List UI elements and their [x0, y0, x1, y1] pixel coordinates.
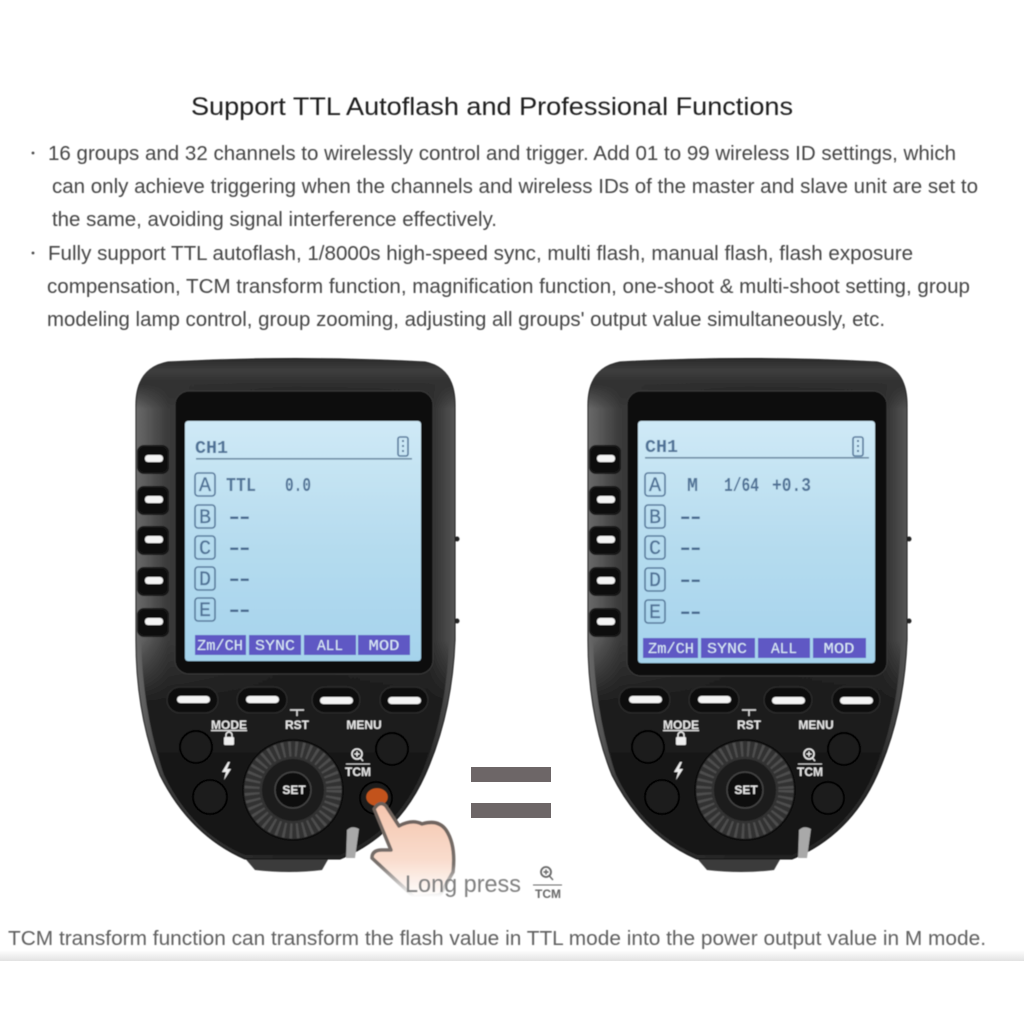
key labels: RST [737, 718, 762, 732]
dial: SET [734, 783, 758, 797]
key labels: TCM [797, 765, 823, 779]
device body [588, 358, 907, 859]
side nubs [906, 536, 912, 542]
TCM button [812, 782, 844, 814]
long press label [405, 867, 562, 901]
LCD screen: -- [229, 599, 250, 621]
LCD screen: +0.3 [772, 475, 811, 497]
icon: pressing hand [366, 788, 454, 897]
LCD screen: B [199, 507, 211, 530]
LCD screen: E [199, 600, 211, 623]
LCD screen [185, 421, 421, 661]
LCD screen: Zm/CH [648, 642, 694, 658]
icon: TCM zoom [533, 867, 562, 901]
icon: TCM zoom: TCM [535, 887, 561, 901]
left side buttons [138, 446, 168, 636]
LCD screen: ALL [317, 639, 343, 655]
dial [695, 740, 795, 840]
LCD screen [638, 421, 875, 663]
LCD screen: C [199, 538, 211, 561]
text block: feature list: 16 groups and 32 channels to wirelessly control and trigger. Add 01 to 99 wireless ID settings, which [48, 143, 956, 165]
text block: feature list: compensation, TCM transform function, magnification function, one-shoot & multi-shoot setting, group [47, 276, 970, 298]
key labels: MODE [663, 718, 699, 732]
text block: feature list: Fully support TTL autoflash, 1/8000s high-speed sync, multi flash, manual flash, flash exposure [48, 243, 913, 265]
LCD screen: CH1 [195, 439, 228, 459]
LCD screen: A [199, 475, 211, 498]
LCD screen: -- [680, 601, 701, 623]
text block: feature list: modeling lamp control, group zooming, adjusting all groups' output value simultaneously, etc. [47, 309, 885, 331]
side nubs [454, 536, 460, 542]
LCD screen: MOD [824, 642, 854, 658]
menu button [376, 733, 408, 765]
LCD screen: 1/64 [724, 475, 759, 497]
screen bezel [627, 391, 887, 676]
LCD screen: ALL [771, 642, 797, 658]
LCD screen: -- [680, 569, 701, 591]
text block: feature list: the same, avoiding signal interference effectively. [52, 209, 497, 231]
text block: feature list: can only achieve triggering when the channels and wireless IDs of the master and slave unit are set to [52, 176, 978, 198]
key labels: RST [285, 718, 310, 732]
round buttons [632, 731, 664, 763]
LCD screen: SYNC [255, 639, 295, 655]
caption: TCM transform function can transform the flash value in TTL mode into the power output value in M mode. [8, 928, 986, 950]
key labels [663, 710, 834, 780]
LCD screen: CH1 [645, 438, 678, 458]
device body [136, 358, 455, 859]
device: right transmitter in M mode [588, 358, 912, 872]
LCD screen: MOD [368, 639, 400, 655]
title: Support TTL Autoflash and Professional Functions [191, 93, 793, 121]
key labels: MENU [346, 718, 382, 732]
LCD screen: -- [229, 506, 250, 528]
LCD screen: -- [680, 537, 701, 559]
soft keys [167, 687, 428, 713]
LCD screen: C [649, 538, 661, 561]
LCD screen: 0.0 [285, 475, 311, 497]
key labels: MODE [211, 718, 247, 732]
LCD screen: -- [680, 506, 701, 528]
hot shoe foot [243, 856, 330, 872]
LCD screen: SYNC [707, 642, 747, 658]
LCD screen: E [649, 602, 661, 625]
soft keys [619, 687, 880, 713]
light indicator [798, 827, 811, 858]
light indicator [346, 827, 359, 858]
text block: feature list [32, 143, 978, 331]
flash button [645, 780, 679, 814]
key labels: TCM [345, 765, 371, 779]
flash button [193, 780, 227, 814]
screen bezel [175, 391, 433, 674]
dial [243, 740, 343, 840]
menu button [828, 733, 860, 765]
key labels [211, 710, 382, 780]
LCD screen: Zm/CH [197, 639, 243, 655]
LCD screen: B [649, 507, 661, 530]
round buttons [180, 731, 212, 763]
hot shoe foot [695, 856, 782, 872]
LCD screen: M [687, 475, 698, 497]
device: left transmitter in TTL mode [136, 358, 460, 872]
LCD screen: D [199, 569, 211, 592]
LCD screen: A [649, 475, 661, 498]
LCD screen: -- [229, 537, 250, 559]
dial: SET [282, 783, 306, 797]
LCD screen: TTL [226, 475, 256, 497]
long press label: Long press [405, 871, 521, 898]
LCD screen: -- [229, 568, 250, 590]
equals sign [471, 767, 551, 818]
TCM button pressed [360, 782, 392, 814]
LCD screen: D [649, 570, 661, 593]
key labels: MENU [798, 718, 834, 732]
left side buttons [590, 446, 620, 636]
